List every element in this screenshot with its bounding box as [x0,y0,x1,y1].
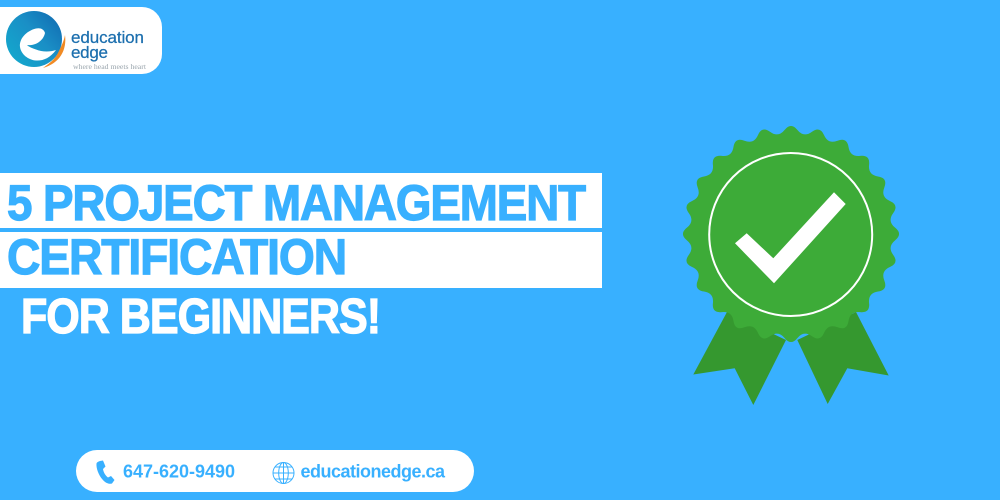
right ribbon [797,312,889,404]
scalloped seal [683,126,899,342]
logo wordmark: education [71,28,144,47]
logo tagline: where head meets heart [73,63,146,71]
title bar: line 2 [0,232,602,288]
check mark [735,192,846,283]
icon: education edge swirl [6,11,65,68]
website: educationedge.ca [300,462,446,482]
title line 3: FOR BEGINNERS! [21,290,380,344]
icon: award badge with check mark [683,126,899,405]
title banner [0,173,602,344]
logo card [0,7,162,74]
logo wordmark [71,28,144,62]
icon: phone [96,460,114,484]
title bar: line 1 [0,173,602,228]
contact pill [76,450,474,492]
phone number: 647-620-9490 [123,462,235,482]
title line 2: CERTIFICATION [7,229,346,285]
title line 1: 5 PROJECT MANAGEMENT [7,175,586,231]
left ribbon [693,312,786,405]
logo wordmark: edge [71,43,108,62]
seal inner ring [709,153,872,316]
icon: globe [273,462,294,484]
